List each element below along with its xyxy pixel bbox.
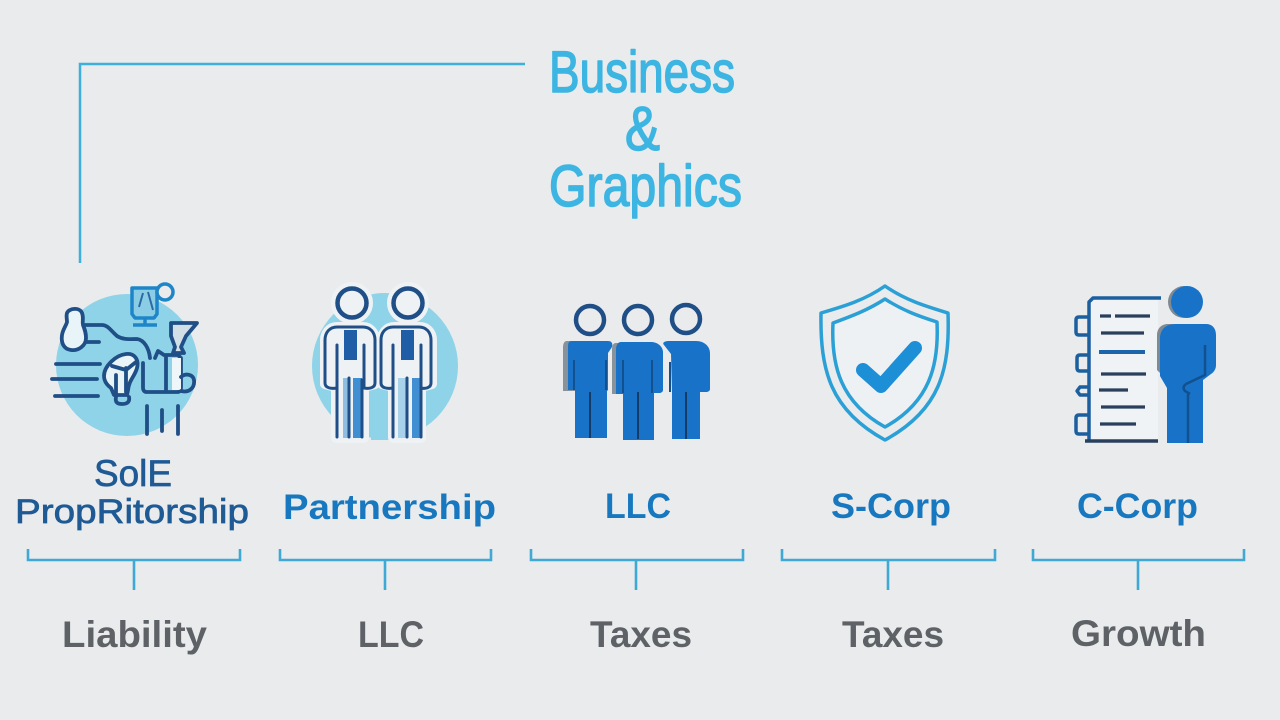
- title: [549, 40, 742, 219]
- title: Business: [549, 40, 735, 105]
- title: Graphics: [549, 154, 742, 219]
- descriptor labels: Liability: [62, 614, 207, 655]
- icon: shield check: [821, 286, 948, 440]
- heading: Sole Proprietorship: [15, 453, 249, 531]
- headings: entity types: C-Corp: [1077, 487, 1198, 526]
- icon: sole proprietorship: [52, 284, 198, 436]
- heading: Sole Proprietorship: PropRitorship: [15, 493, 249, 531]
- title: &: [625, 95, 660, 164]
- headings: entity types: [283, 487, 1198, 527]
- descriptor labels: Taxes: [842, 614, 944, 655]
- descriptor labels: [62, 613, 1206, 655]
- descriptor labels: Growth: [1071, 613, 1206, 654]
- icon: partnership: [312, 287, 458, 440]
- icon: LLC group: [563, 305, 710, 440]
- headings: entity types: Partnership: [283, 488, 496, 527]
- heading: Sole Proprietorship: SolE: [94, 453, 172, 494]
- descriptor labels: Taxes: [590, 614, 692, 655]
- headings: entity types: S-Corp: [831, 487, 951, 526]
- title connector line: [80, 64, 525, 263]
- descriptor labels: LLC: [358, 614, 424, 655]
- headings: entity types: LLC: [605, 487, 671, 526]
- brackets connecting headings to descriptors: [28, 549, 1244, 590]
- icon: check mark: [863, 348, 915, 386]
- icon: C-Corp document and person: [1076, 286, 1216, 443]
